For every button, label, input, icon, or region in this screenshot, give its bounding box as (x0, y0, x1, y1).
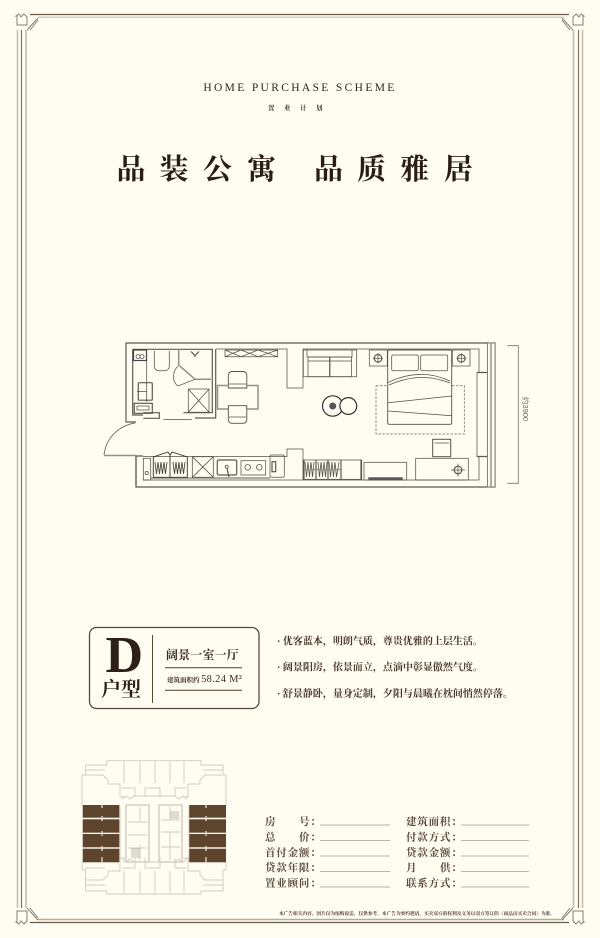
tower outline (82, 761, 226, 894)
fridge (270, 455, 284, 477)
highlighted units left (83, 803, 119, 864)
sofa (303, 350, 357, 377)
selling point 1: · 优客蓝本，明朗气质，尊贵优雅的上层生活。 (277, 634, 483, 648)
main title: 品装公寓品质雅居 (116, 153, 473, 186)
shoe cabinet (153, 452, 187, 477)
toilet (138, 383, 152, 400)
form row: total price: 付款方式： (406, 830, 462, 844)
form row: loan term: 月 (406, 862, 417, 874)
bed (388, 350, 452, 424)
form row: loan term: 供： (440, 861, 463, 874)
form row: down payment: 贷款金额： (406, 846, 462, 859)
form row: room number: 房 (265, 815, 276, 828)
kitchen counter (143, 452, 284, 480)
selling point 2: · 阔景阳房，依景而立，点滴中彰显傲然气度。 (277, 660, 483, 674)
form row: loan term: 贷款年限： (265, 861, 322, 874)
form row: consultant: 联系方式： (406, 876, 462, 890)
form row: total price: 总 (265, 830, 276, 844)
unit type label: 户型 (101, 678, 141, 701)
chinese subheading: 置业计划 (268, 103, 332, 112)
form row: total price (265, 830, 529, 844)
unit name: 阔景一室一厅 (166, 647, 239, 662)
wardrobe (303, 460, 362, 479)
ventilation strip (225, 350, 278, 357)
form row: total price: 价： (299, 830, 322, 844)
form row: room number: 建筑面积： (406, 815, 462, 828)
form row: consultant: 置业顾问： (265, 876, 322, 890)
unit area: 建筑面积约 58.24 M² (167, 674, 242, 685)
core right (159, 805, 182, 862)
building key plan (82, 761, 226, 894)
bathroom (133, 349, 216, 420)
wash basin (134, 403, 152, 413)
dimension marker: 约3900 (521, 397, 531, 421)
core left (126, 805, 149, 862)
form row: down payment: 首付金额： (265, 846, 322, 859)
bathtub fixture (154, 351, 169, 371)
shower (188, 389, 209, 412)
form row: consultant (265, 876, 529, 890)
rug (376, 386, 464, 434)
desk and chair (416, 439, 468, 480)
unit letter: D (106, 627, 143, 684)
exterior walls (126, 343, 495, 487)
form row: room number (265, 815, 529, 828)
selling points (277, 634, 513, 700)
disclaimer: 本广告相关内容、图片仅为缩购说需，仅供参考。本广告为要约邀请，买卖双方的权利及义务以双方签订的《商品房买卖合同》为准。 (279, 910, 555, 917)
highlighted units right (189, 803, 226, 864)
english heading: HOME PURCHASE SCHEME (203, 82, 397, 94)
stove (241, 461, 266, 475)
form row: room number: 号： (299, 815, 322, 828)
form row: loan term (265, 861, 529, 874)
entrance door (104, 423, 143, 487)
dimension marker (507, 346, 531, 483)
door swing (174, 366, 195, 386)
selling point 3: · 舒景静卧，量身定制，夕阳与晨曦在枕间悄然停落。 (277, 687, 513, 700)
unit badge (90, 627, 259, 708)
floor plan (104, 343, 531, 487)
purchase form (265, 815, 529, 890)
round coffee tables (322, 396, 357, 416)
form row: down payment (265, 846, 529, 859)
sink (217, 460, 237, 475)
tv cabinet (364, 462, 407, 480)
dining table and chairs (218, 372, 258, 423)
bedside tables (369, 350, 470, 366)
